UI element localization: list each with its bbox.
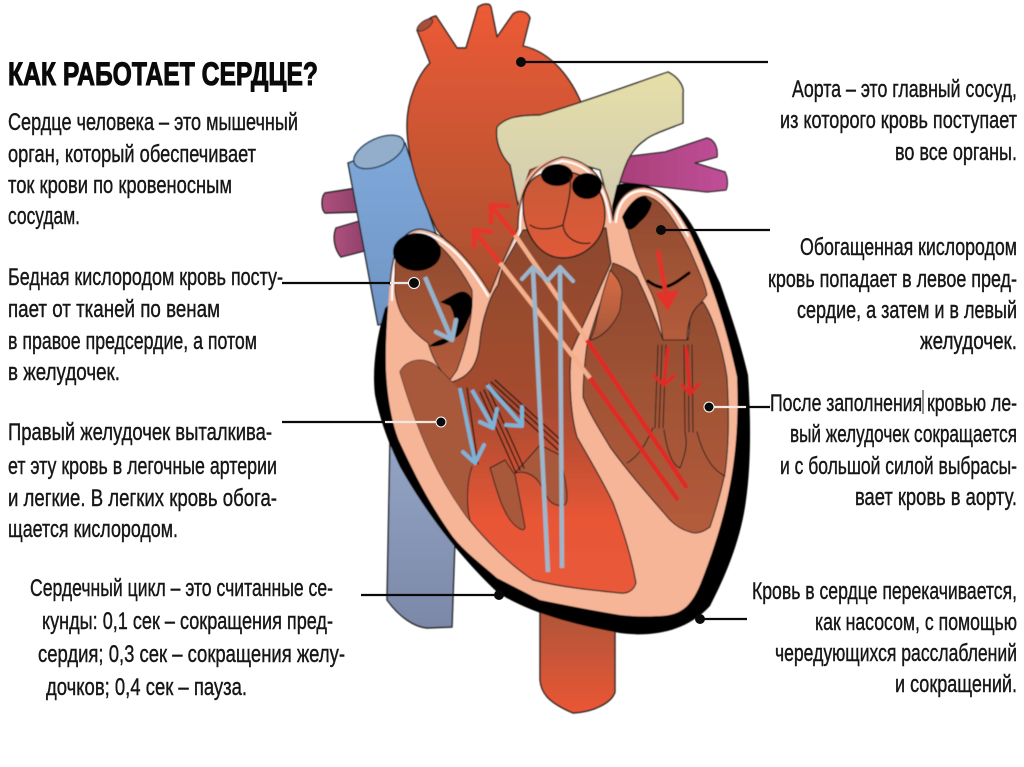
blue flow arrows up	[522, 267, 573, 572]
blue flow arrow in right atrium	[425, 277, 456, 340]
orange mitral leaflet	[590, 270, 622, 340]
callout: right ventricle	[282, 417, 446, 427]
red flow arrow in left atrium	[655, 250, 679, 311]
text block: cardiac cycle: кунды: 0,1 сек – сокращения пред-	[42, 608, 333, 635]
left ventricle	[583, 263, 728, 533]
left ventricle papillary muscles	[627, 345, 725, 476]
callout: cardiac cycle	[361, 590, 504, 600]
text block: intro: Сердце человека – это мышечный	[8, 109, 298, 136]
text block: deoxygenated blood: Бедная кислородом кровь посту-	[8, 264, 283, 291]
text block: intro: сосудам.	[8, 203, 80, 230]
text block: deoxygenated blood: пает от тканей по венам	[8, 296, 220, 323]
text block: intro: ток крови по кровеносным	[8, 172, 232, 199]
descending aorta	[540, 600, 615, 713]
callout: right atrium	[282, 278, 420, 288]
callout: left ventricle	[704, 402, 770, 412]
right ventricle papillary muscles	[400, 360, 567, 530]
callout: aorta	[516, 58, 768, 66]
chordae tendineae right	[462, 380, 563, 473]
right atrium	[393, 233, 473, 380]
text block: intro: орган, который обеспечивает	[8, 141, 256, 168]
white contours	[392, 161, 688, 300]
callout: pump	[696, 614, 747, 624]
text block: left ventricle	[770, 390, 1017, 511]
red flow lines to aorta	[474, 205, 687, 500]
pulmonary trunk beige	[497, 72, 683, 218]
right ventricle and pulmonary outflow	[400, 228, 636, 593]
text block: deoxygenated blood: в желудочек.	[8, 359, 120, 386]
pulmonary veins left	[322, 188, 368, 257]
aorta	[407, 4, 600, 293]
text block: right ventricle: Правый желудочек выталкива-	[8, 419, 272, 446]
text block: right ventricle	[8, 419, 277, 543]
text block: right ventricle: щается кислородом.	[8, 516, 178, 543]
text block: right ventricle: и легкие. В легких кровь обога-	[8, 485, 277, 512]
superior vena cava	[348, 128, 438, 325]
text block: pump	[752, 578, 1017, 698]
inferior vena cava	[387, 440, 455, 628]
heart outer wall	[374, 183, 750, 634]
heart muscle wall	[386, 158, 738, 616]
left atrium	[622, 196, 707, 340]
text block: cardiac cycle: дочков; 0,4 сек – пауза.	[46, 674, 247, 701]
aortic valve	[523, 164, 605, 258]
title: КАК РАБОТАЕТ СЕРДЦЕ?	[8, 56, 318, 92]
text block: cardiac cycle	[30, 575, 345, 701]
text block: right ventricle: ет эту кровь в легочные артерии	[8, 453, 277, 480]
blue flow arrows in right ventricle	[460, 385, 522, 463]
text block: cardiac cycle: Сердечный цикл – это считанные се-	[30, 575, 333, 602]
text block: deoxygenated blood: в правое предсердие, а потом	[8, 328, 257, 355]
pulmonary veins right	[617, 138, 727, 192]
text block: aorta	[780, 76, 1017, 166]
text block: cardiac cycle: сердия; 0,3 сек – сокращения желу-	[38, 641, 345, 668]
callout: left atrium	[656, 226, 770, 234]
heart diagram	[322, 4, 750, 713]
text block: intro	[8, 109, 298, 230]
text block: oxygenated blood	[768, 234, 1017, 355]
red flow arrows in left ventricle	[654, 347, 699, 394]
text block: deoxygenated blood	[8, 264, 283, 386]
